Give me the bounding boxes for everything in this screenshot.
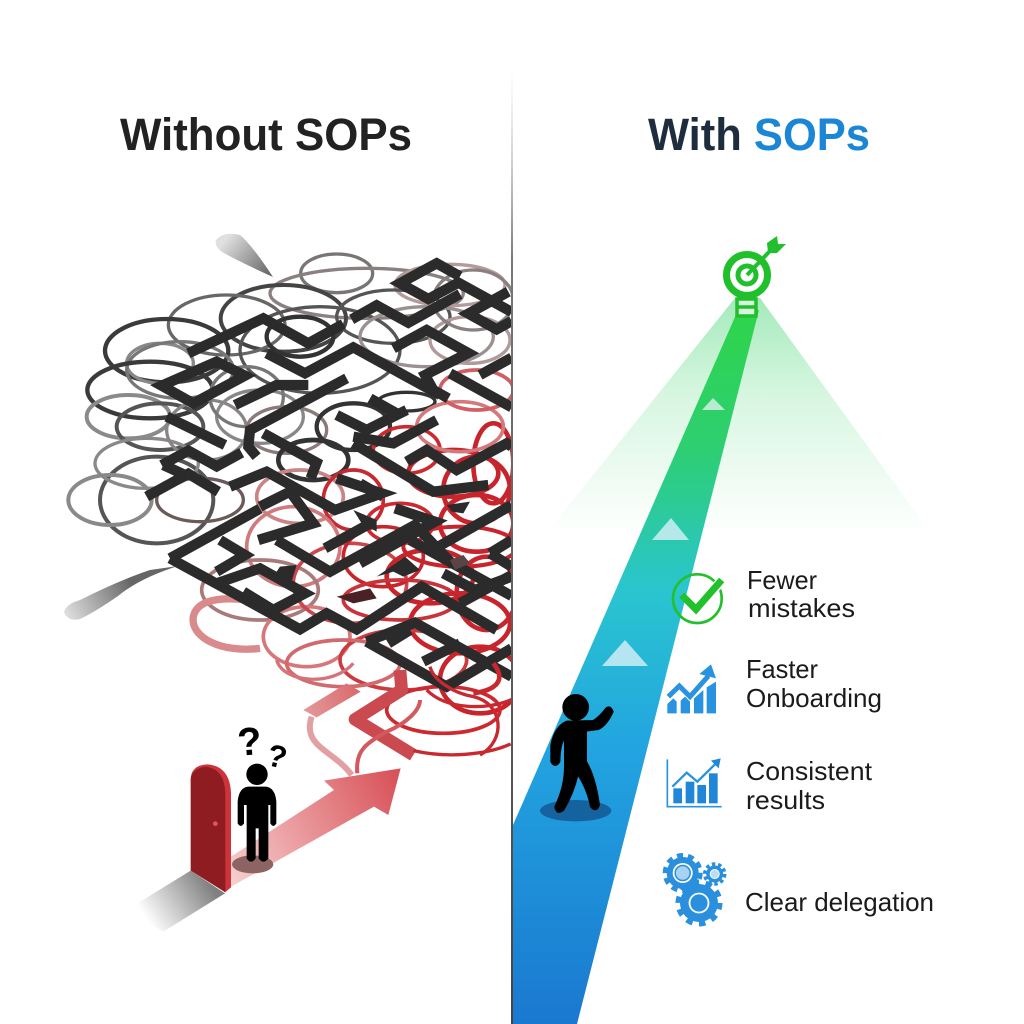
wisp: lower tail bbox=[64, 566, 178, 620]
red door bbox=[191, 764, 231, 892]
label: results bbox=[746, 785, 825, 815]
gray tangled loops bbox=[68, 254, 513, 543]
ground shadow bbox=[540, 800, 611, 821]
label: Fewer bbox=[747, 565, 817, 595]
icon: gears bbox=[665, 856, 725, 924]
label: mistakes bbox=[748, 593, 855, 623]
icon: target on bulb bbox=[726, 236, 786, 316]
benefit: faster onboarding bbox=[667, 654, 882, 713]
green light cone bbox=[545, 298, 932, 535]
question mark small: ? bbox=[264, 737, 291, 776]
red arrow bbox=[231, 768, 401, 887]
confused person bbox=[238, 764, 276, 862]
icon: rising chart bbox=[667, 664, 716, 713]
blue-green path bbox=[513, 310, 759, 1024]
question mark large: ? bbox=[236, 719, 263, 765]
red path below maze bbox=[277, 660, 511, 775]
icon: check circle bbox=[673, 574, 724, 623]
red ribbon piece bbox=[303, 683, 361, 717]
red tangled loops bbox=[193, 370, 520, 733]
wisp: upper tail bbox=[216, 234, 273, 277]
benefit: fewer mistakes bbox=[673, 565, 855, 623]
figure bbox=[551, 695, 613, 812]
benefit: clear delegation bbox=[665, 856, 934, 924]
label bbox=[746, 654, 882, 713]
tangled maze bbox=[68, 254, 520, 775]
door knob bbox=[213, 821, 218, 826]
label: Clear delegation bbox=[745, 887, 934, 917]
label bbox=[746, 756, 873, 815]
divider bbox=[511, 70, 513, 1024]
path triangle 1 bbox=[702, 398, 725, 410]
walking person bbox=[540, 695, 613, 821]
title: Without SOPs: Without SOPs bbox=[120, 109, 412, 160]
path triangle 3 bbox=[602, 640, 648, 666]
dart bbox=[747, 252, 769, 275]
bulb base bbox=[737, 299, 756, 316]
title: With SOPs: With SOPs bbox=[648, 109, 870, 160]
label: Faster bbox=[746, 654, 818, 684]
maze fragments bbox=[273, 502, 470, 603]
curling red lines bbox=[310, 717, 352, 775]
label: Consistent bbox=[746, 756, 873, 786]
label bbox=[747, 565, 855, 623]
without-SOPs scene bbox=[127, 719, 401, 932]
floor shadow bbox=[232, 855, 273, 873]
icon: bar chart with trend bbox=[667, 758, 722, 807]
door front bbox=[191, 767, 225, 892]
target rings bbox=[726, 254, 768, 296]
label: Onboarding bbox=[746, 683, 882, 713]
shadow behind door bbox=[127, 871, 225, 932]
benefit: consistent results bbox=[667, 756, 873, 815]
black isometric maze lines bbox=[147, 263, 512, 687]
red thick route bbox=[355, 670, 413, 755]
path triangle 2 bbox=[652, 518, 689, 540]
door side bbox=[191, 764, 231, 892]
